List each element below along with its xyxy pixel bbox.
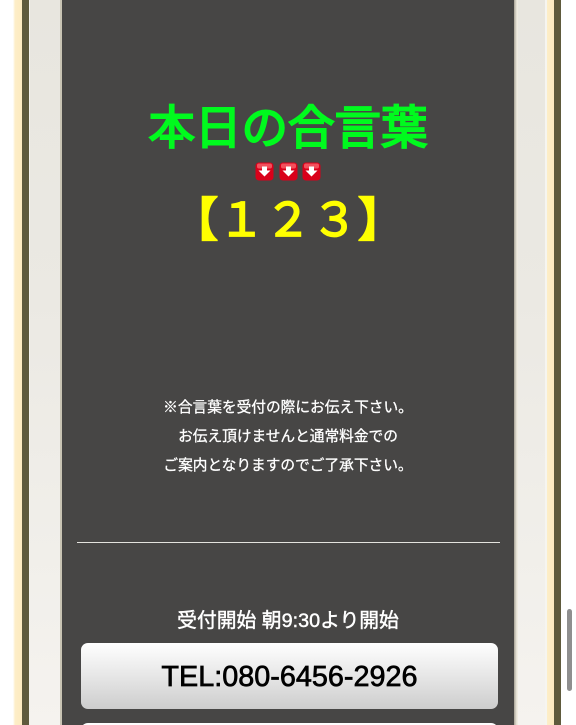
next button top edge xyxy=(81,723,498,725)
left inner panel xyxy=(30,0,62,725)
button: phone number xyxy=(81,643,498,709)
heading: passphrase title: 本日の合言葉 xyxy=(148,102,428,154)
main dark panel xyxy=(62,0,514,725)
reception hours: 受付開始 朝9:30より開始 xyxy=(177,610,399,632)
left frame border xyxy=(0,0,62,725)
notice text xyxy=(163,399,413,474)
divider xyxy=(77,542,500,543)
notice text: ご案内となりますのでご了承下さい。 xyxy=(163,458,413,474)
right inner panel xyxy=(514,0,545,725)
icon: down arrow 3 xyxy=(302,162,320,180)
scrollbar xyxy=(567,609,572,691)
button: phone number: TEL:080-6456-2926 xyxy=(161,661,418,693)
passphrase value: 【１２３】 xyxy=(172,194,404,246)
icons: three red down arrows xyxy=(256,162,320,180)
icon: down arrow 2 xyxy=(280,162,298,180)
notice text: ※合言葉を受付の際にお伝え下さい。 xyxy=(163,400,413,416)
icon: down arrow 1 xyxy=(256,162,274,180)
right frame border xyxy=(545,0,576,725)
notice text: お伝え頂けませんと通常料金での xyxy=(178,429,398,445)
